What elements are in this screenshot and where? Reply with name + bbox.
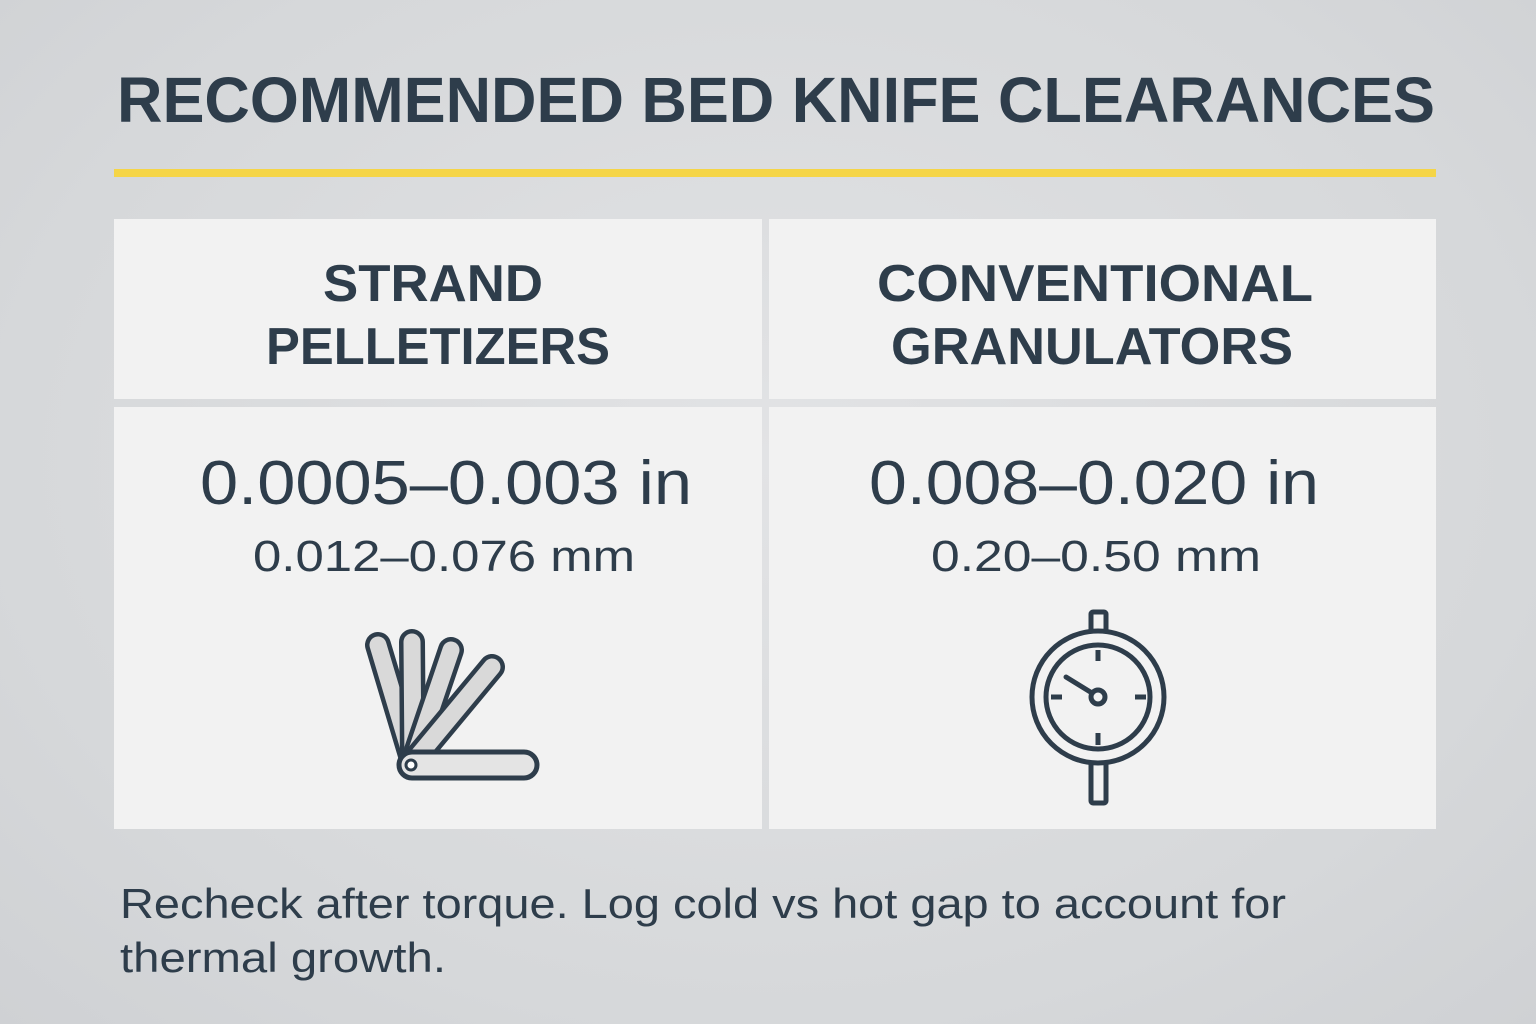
panel: strand pelletizers header [114, 219, 762, 399]
panel: conventional granulators header: GRANULATORS [891, 318, 1293, 376]
footer note [120, 880, 1286, 981]
panel: strand pelletizers values: 0.0005–0.003 in [200, 449, 692, 518]
panel: strand pelletizers header: STRAND [323, 255, 543, 313]
title: RECOMMENDED BED KNIFE CLEARANCES [117, 64, 1435, 136]
panel: strand pelletizers values: 0.012–0.076 mm [253, 532, 635, 581]
yellow underline [114, 169, 1436, 177]
icon: feeler gauge [378, 642, 537, 778]
panel: conventional granulators header: CONVENTIONAL [877, 255, 1313, 313]
panel: conventional granulators values: 0.008–0.020 in [869, 449, 1319, 518]
icon: dial indicator [1032, 612, 1164, 803]
panel: conventional granulators header [769, 219, 1436, 399]
panel: conventional granulators values: 0.20–0.50 mm [931, 532, 1261, 581]
panel: strand pelletizers header: PELLETIZERS [266, 318, 610, 376]
footer note: thermal growth. [120, 934, 446, 981]
panel: conventional granulators values [769, 407, 1436, 829]
footer note: Recheck after torque. Log cold vs hot gap to account for [120, 880, 1286, 927]
panel: strand pelletizers values [114, 407, 762, 829]
